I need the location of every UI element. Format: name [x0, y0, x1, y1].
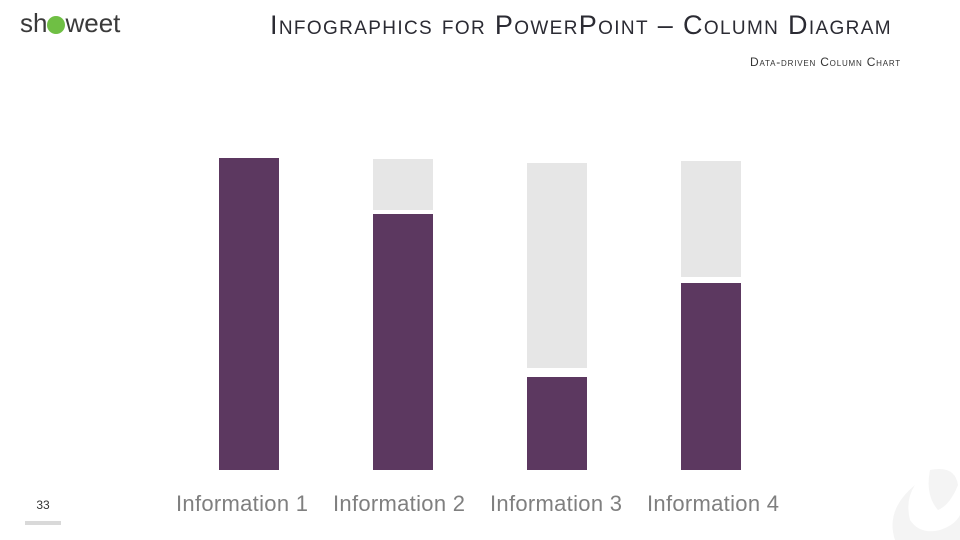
page number: 33 — [36, 498, 50, 512]
label 1: Information 1 — [176, 491, 308, 516]
column 4 — [681, 161, 741, 470]
column 1 — [219, 158, 279, 470]
label 4: Information 4 — [647, 491, 779, 516]
column 2 — [373, 159, 433, 470]
logo: sh weet — [20, 8, 120, 38]
subtitle: Data-driven Column Chart — [750, 55, 901, 69]
label 3: Information 3 — [490, 491, 622, 516]
label 2: Information 2 — [333, 491, 465, 516]
column chart — [219, 158, 741, 470]
page number — [25, 498, 61, 525]
decorative watermark logo — [892, 469, 960, 540]
column 3 — [527, 163, 587, 470]
title: Infographics for PowerPoint – Column Diagram — [270, 10, 892, 40]
